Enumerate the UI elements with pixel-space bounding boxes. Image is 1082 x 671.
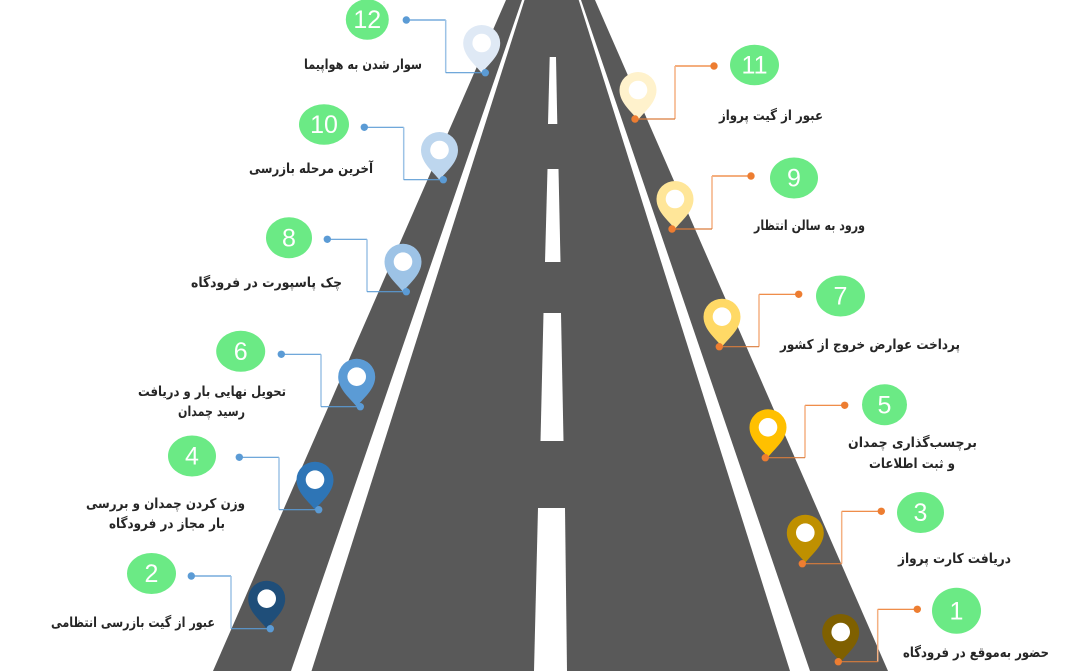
- step 5: برچسب‌گذاری چمدان: [848, 434, 977, 451]
- step 7: 7: [834, 283, 847, 311]
- pin 6: [338, 359, 375, 407]
- pin 10: [421, 132, 458, 180]
- step 10: آخرین مرحله بازرسی: [249, 160, 373, 177]
- pin 9: [656, 181, 694, 229]
- step 4: بار مجاز در فرودگاه: [109, 515, 225, 532]
- step 5: [750, 384, 977, 472]
- pin 8: [384, 244, 422, 292]
- pin 5: [750, 409, 786, 457]
- step 6: 6: [234, 338, 248, 366]
- step 12: [304, 0, 500, 76]
- step 2: [51, 553, 285, 632]
- step 12: 12: [353, 6, 381, 34]
- step 7: پرداخت عوارض خروج از کشور: [779, 337, 960, 353]
- step 1: [822, 588, 1049, 665]
- step 9: 9: [787, 165, 801, 193]
- step 3: دریافت کارت پرواز: [897, 551, 1011, 567]
- step 9: ورود به سالن انتظار: [753, 218, 865, 234]
- step 9: [656, 158, 865, 234]
- step 4: [86, 436, 334, 532]
- step 4: 4: [185, 443, 199, 471]
- pin 3: [787, 515, 824, 563]
- step 11: عبور از گیت پرواز: [718, 107, 823, 124]
- pin 12: [463, 25, 500, 73]
- step 4: وزن کردن چمدان و بررسی: [86, 496, 245, 512]
- step 1: 1: [950, 597, 963, 625]
- pin 2: [248, 581, 285, 629]
- step 12: سوار شدن به هواپیما: [304, 57, 422, 73]
- step 10: [249, 104, 458, 183]
- step 8: [191, 217, 422, 295]
- step 5: و ثبت اطلاعات: [869, 456, 955, 472]
- step 8: 8: [282, 224, 296, 252]
- road: [213, 0, 888, 671]
- pin 1: [822, 614, 859, 662]
- step 11: 11: [742, 52, 767, 80]
- step 7: [704, 276, 960, 353]
- step 10: 10: [310, 111, 338, 139]
- step 3: [787, 492, 1011, 567]
- step 3: 3: [914, 499, 927, 527]
- pin 11: [620, 72, 656, 120]
- pin 7: [704, 299, 740, 347]
- step 6: تحویل نهایی بار و دریافت: [138, 384, 286, 400]
- step 2: عبور از گیت بازرسی انتظامی: [51, 614, 215, 631]
- step 11: [620, 45, 823, 124]
- step 1: حضور به‌موقع در فرودگاه: [903, 644, 1049, 661]
- step 2: 2: [145, 560, 158, 588]
- step 5: 5: [878, 391, 891, 419]
- step 8: چک پاسپورت در فرودگاه: [191, 274, 342, 291]
- step 6: [138, 331, 375, 420]
- step 6: رسید چمدان: [178, 404, 245, 420]
- pin 4: [296, 462, 334, 510]
